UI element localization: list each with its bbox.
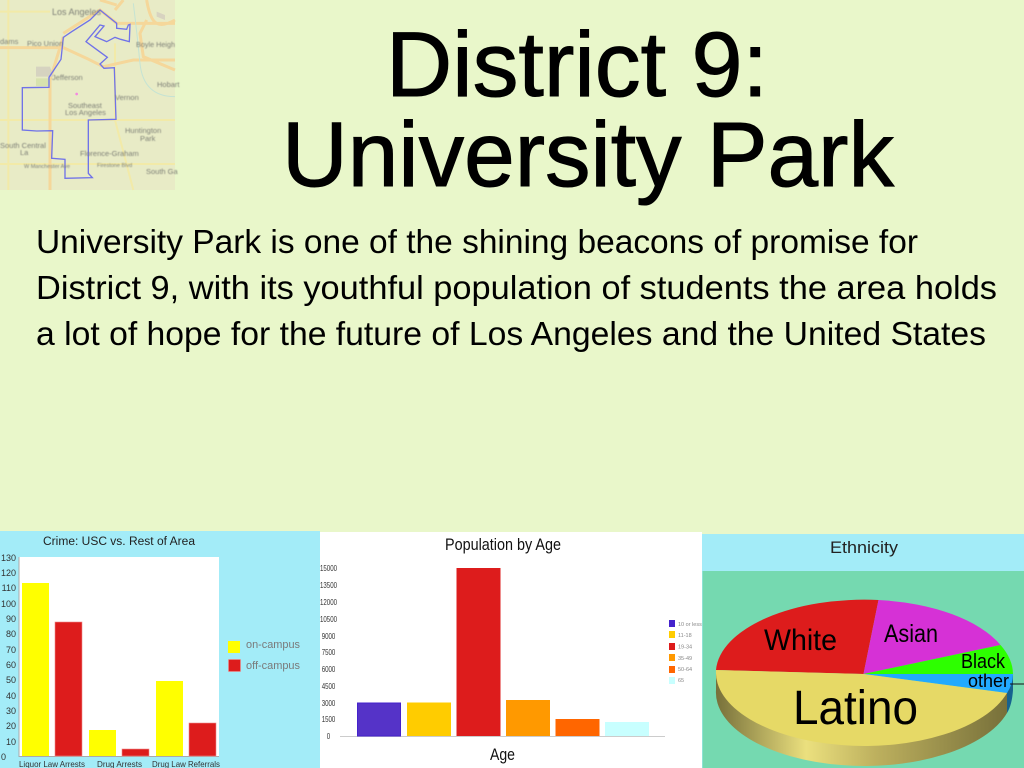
age y axis labels: 15000 [320,563,337,573]
map of district 9: Los Angeles [52,7,102,17]
crime y axis labels: 100 [1,599,16,609]
panel: population by age chart [320,532,702,768]
age chart title: Population by Age [445,535,561,554]
map of district 9: Pico Union [27,39,63,48]
age legend: 10 or less [678,622,702,628]
pie side [716,670,1007,766]
map of district 9: Florence-Graham [80,149,139,158]
crime y axis labels: 10 [6,737,16,747]
crime chart title: Crime: USC vs. Rest of Area [43,536,196,548]
age legend: 35-49 [678,656,692,662]
age y axis labels: 13500 [320,580,337,590]
age y axis labels [320,563,337,741]
pie labels: other [968,671,1009,691]
description text: a lot of hope for the future of Los Angeles and the United States [36,315,986,352]
map of district 9: La [20,148,29,157]
age legend: 50-64 [678,667,692,673]
age y axis labels: 3000 [322,698,335,708]
crime y axis labels: 110 [2,583,16,593]
age y axis labels: 7500 [322,647,335,657]
age legend: 19-34 [678,644,692,650]
crime y axis labels [1,553,16,762]
age y axis labels: 10500 [320,614,337,624]
crime legend: off-campus [246,660,300,672]
age bars [358,568,649,736]
title [282,14,895,206]
pie labels: Asian [884,620,938,648]
description text: District 9, with its youthful population of students the area holds [36,269,997,306]
crime plot area [19,557,219,756]
map of district 9: South Central [0,141,46,150]
pie slice: other [864,674,1013,693]
crime y axis labels: 30 [6,706,16,716]
pie slice: asian [864,600,1000,674]
age y axis labels: 4500 [322,681,335,691]
crime y axis labels: 60 [6,660,16,670]
crime legend [228,639,300,672]
title: District 9: [386,14,768,116]
panel: ethnicity chart [702,534,1024,768]
crime y axis labels: 70 [6,645,16,655]
pie labels: Black [961,651,1006,673]
age y axis labels: 6000 [322,664,335,674]
crime y axis labels: 20 [6,721,16,731]
map of district 9: Southeast [68,101,103,110]
age x axis label: Age [490,745,515,764]
other leader line [1010,683,1024,685]
age y axis labels: 0 [327,731,330,741]
map of district 9: Jefferson [52,73,83,82]
crime y axis labels: 80 [6,629,16,639]
pie slice: black [864,645,1013,674]
crime x axis labels [19,759,220,768]
panel: crime chart [0,531,320,768]
crime y axis labels: 90 [6,614,16,624]
pie slice: latino [716,670,1007,746]
map of district 9: dams [0,37,19,46]
crime y axis labels: 130 [1,553,16,563]
map of district 9: Vernon [115,93,139,102]
crime legend: on-campus [246,639,300,651]
map of district 9: Hobart [157,80,180,89]
age y axis labels: 12000 [320,597,337,607]
map of district 9: Los Angeles [65,108,106,117]
map of district 9 [0,0,180,190]
description text [36,223,997,352]
age legend: 11-18 [678,633,692,639]
map of district 9: South Ga [146,167,179,176]
map of district 9: Park [140,134,156,143]
ethnicity title: Ethnicity [830,538,899,557]
age legend: 65 [678,678,684,684]
crime bars [22,583,216,756]
age y axis labels: 1500 [322,714,335,724]
map of district 9: W Manchester Ave [24,164,70,170]
crime y axis labels: 120 [1,568,16,578]
description text: University Park is one of the shining beacons of promise for [36,223,918,260]
map of district 9: Boyle Heigh [136,40,175,49]
map of district 9: Firestone Blvd [97,163,132,169]
crime y axis labels: 50 [6,675,16,685]
age y axis labels: 9000 [322,631,335,641]
pie labels [764,620,1009,735]
title: University Park [282,104,895,206]
pie labels: Latino [793,682,918,735]
map of district 9: Huntington [125,126,161,135]
crime y axis labels: 40 [6,691,16,701]
crime y axis labels: 0 [1,752,6,762]
pie labels: White [764,624,837,657]
age legend [669,620,702,684]
age axis [340,736,665,738]
pie slice: white [716,600,878,674]
